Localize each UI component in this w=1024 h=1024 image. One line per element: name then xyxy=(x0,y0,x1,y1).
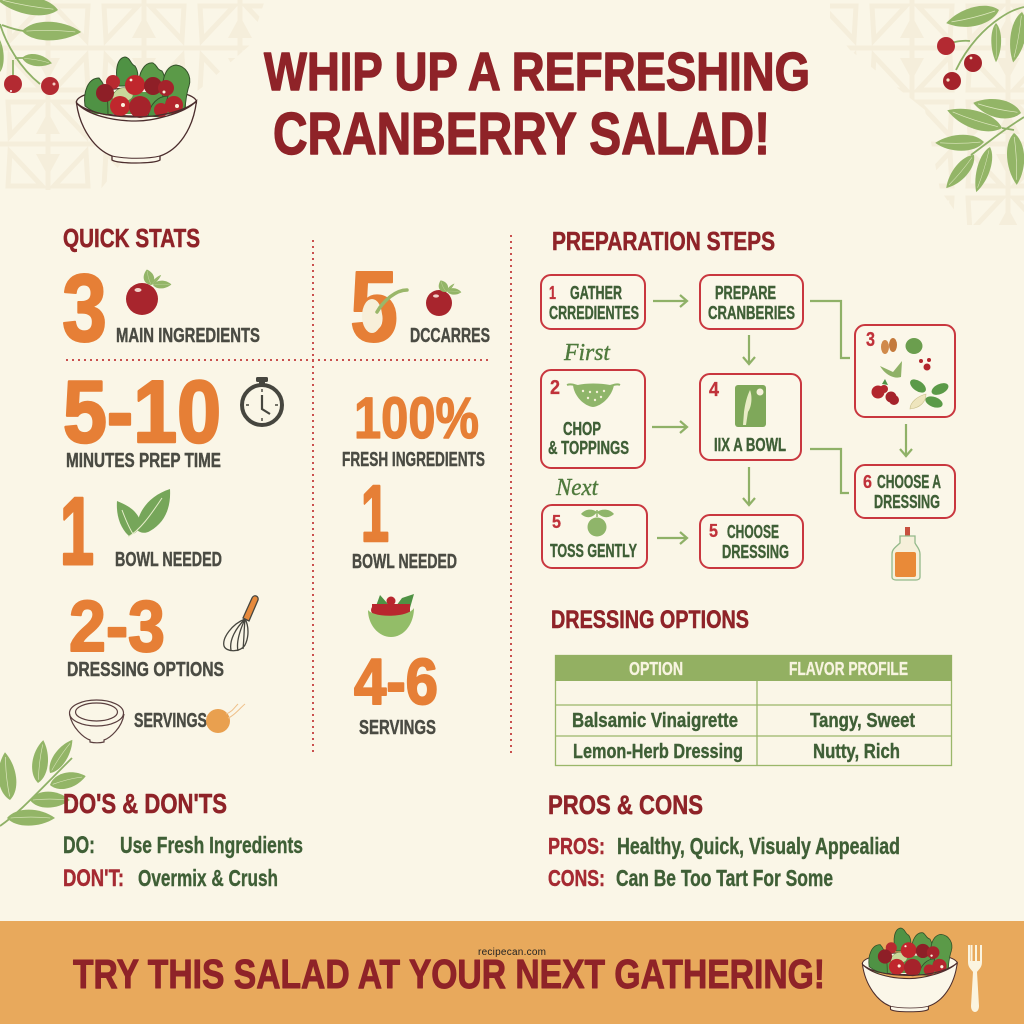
step box: choose a dressing 6: DRESSING xyxy=(874,492,940,512)
stat: 1 bowl needed right: BOWL NEEDED xyxy=(352,551,457,573)
icon: stopwatch xyxy=(242,377,282,425)
table: dressing options xyxy=(555,655,952,766)
annotation: first: First xyxy=(563,340,611,366)
step box: gather ingredients: CRREDIENTES xyxy=(549,303,639,323)
call to action: TRY THIS SALAD AT YOUR NEXT GATHERING! xyxy=(73,951,825,997)
arrow: prepare to ingredients connector xyxy=(810,301,850,358)
panel: do's and don'ts xyxy=(63,788,303,892)
icon: green leaf xyxy=(117,489,170,537)
table: dressing options: FLAVOR PROFILE xyxy=(789,659,908,679)
step box: mix a bowl: IIX A BOWL xyxy=(714,435,786,455)
title: CRANBERRY SALAD! xyxy=(273,101,770,167)
panel: dressing options xyxy=(551,606,952,766)
step box: toss gently: TOSS GENTLY xyxy=(550,541,637,561)
icon: small green salad bowl xyxy=(368,594,414,637)
stat: 2-3 dressing options xyxy=(67,587,224,681)
arrow: prepare to mix xyxy=(743,335,755,364)
stat: 5 dccarres: 5 xyxy=(350,251,398,363)
step box: choose a dressing 6: CHOOSE A xyxy=(877,472,941,492)
step box: chop and toppings xyxy=(541,370,645,468)
stat: 5 dccarres: DCCARRES xyxy=(410,325,490,347)
step box: chop and toppings: & TOPPINGS xyxy=(548,438,629,458)
stat: 5-10 minutes prep time: 5-10 xyxy=(63,362,221,461)
panel: quick stats xyxy=(60,223,490,743)
arrow: mix to choose dressing xyxy=(743,467,755,505)
decoration: top-left branch with berries xyxy=(0,0,81,95)
step box: chop and toppings: CHOP xyxy=(563,419,601,439)
table: dressing options: Nutty, Rich xyxy=(813,741,900,763)
stat: servings with outline bowl: SERVINGS xyxy=(134,710,207,732)
arrow: toss to choose dressing xyxy=(657,532,687,544)
step box: mix a bowl: 4 xyxy=(709,379,720,401)
step box: choose dressing 5: DRESSING xyxy=(722,542,789,562)
stat: 1 bowl needed right xyxy=(352,469,457,573)
row: don't: Overmix & Crush xyxy=(138,865,278,891)
table: dressing options: Lemon-Herb Dressing xyxy=(573,741,743,763)
row: pros: PROS: xyxy=(548,833,605,859)
step box: choose dressing 5: CHOOSE xyxy=(727,522,779,542)
stat: 2-3 dressing options: 2-3 xyxy=(69,587,165,667)
step box: gather ingredients xyxy=(541,275,645,329)
stat: 5 dccarres xyxy=(350,251,490,363)
step box: choose a dressing 6 xyxy=(855,465,955,518)
stat: 100% fresh ingredients: 100% xyxy=(354,386,479,451)
heading: pros and cons: PROS & CONS xyxy=(548,790,703,820)
stat: 100% fresh ingredients: FRESH INGREDIENTS xyxy=(342,449,485,471)
stat: 2-3 dressing options: DRESSING OPTIONS xyxy=(67,659,224,681)
row: pros: Healthy, Quick, Visualy Appealiad xyxy=(617,833,900,859)
step box: choose dressing 5: 5 xyxy=(709,521,718,541)
icon: dressing bottle xyxy=(892,527,920,580)
stat: 100% fresh ingredients xyxy=(342,386,485,471)
step box: choose dressing 5 xyxy=(700,515,803,568)
arrow: ingredients to dressing xyxy=(900,424,912,456)
row: cons: CONS: xyxy=(548,865,605,891)
row: cons xyxy=(548,865,833,891)
source credit: recipecan.com xyxy=(478,947,546,958)
icon: fork xyxy=(968,945,982,1012)
arrow: mix to dressing connector xyxy=(810,449,849,493)
step box: ingredients illustration: 3 xyxy=(866,329,875,351)
footer banner xyxy=(0,921,1024,1024)
background pattern: top right xyxy=(828,0,1024,226)
step box: choose a dressing 6: 6 xyxy=(863,472,872,492)
annotation: next: Next xyxy=(555,475,599,501)
heading: preparation steps: PREPARATION STEPS xyxy=(552,226,775,256)
stat: 1 bowl needed xyxy=(60,478,222,585)
table: dressing options: Tangy, Sweet xyxy=(810,710,915,732)
row: do: DO: xyxy=(63,832,95,859)
heading: quick stats: QUICK STATS xyxy=(63,223,200,253)
step box: prepare cranberries: PREPARE xyxy=(715,283,776,303)
row: don't xyxy=(63,865,278,892)
heading: dressing options: DRESSING OPTIONS xyxy=(551,606,749,634)
stat: 1 bowl needed: BOWL NEEDED xyxy=(115,549,222,571)
stat: 3 main ingredients: 3 xyxy=(62,255,107,362)
stat: 3 main ingredients xyxy=(62,255,260,362)
row: cons: Can Be Too Tart For Some xyxy=(616,865,833,891)
icon: salad bowl xyxy=(76,57,196,163)
decoration: top-right branches with berries xyxy=(935,1,1024,194)
decoration: bottom-left leaf branch xyxy=(0,736,88,826)
table: dressing options: Balsamic Vinaigrette xyxy=(572,710,738,732)
stat: 1 bowl needed: 1 xyxy=(60,478,94,585)
step box: chop and toppings: 2 xyxy=(550,377,560,399)
step box: gather ingredients: GATHER xyxy=(570,283,622,303)
table: dressing options: OPTION xyxy=(629,659,683,679)
row: don't: DON'T: xyxy=(63,865,124,892)
background pattern: top left xyxy=(0,0,270,192)
step box: prepare cranberries: CRANBERIES xyxy=(708,303,795,323)
step box: gather ingredients: 1 xyxy=(549,283,556,303)
arrow: gather to prepare xyxy=(653,295,687,307)
title xyxy=(264,42,810,167)
arrow: chop to mix xyxy=(652,421,687,433)
step box: prepare cranberries xyxy=(700,275,803,329)
step box: ingredients illustration xyxy=(855,325,955,417)
icon: whisk xyxy=(224,596,258,651)
row: do xyxy=(63,832,303,859)
panel: preparation steps xyxy=(541,226,955,580)
stat: 4-6 servings: SERVINGS xyxy=(359,717,436,739)
heading: do's and don'ts: DO'S & DON'TS xyxy=(63,788,227,819)
step box: toss gently xyxy=(542,505,647,568)
step box: toss gently: 5 xyxy=(552,512,561,532)
stat: servings with outline bowl xyxy=(70,700,245,743)
stat: 1 bowl needed right: 1 xyxy=(361,469,389,558)
row: do: Use Fresh Ingredients xyxy=(120,832,303,858)
row: pros xyxy=(548,833,900,859)
title: WHIP UP A REFRESHING xyxy=(264,42,810,102)
step box: mix a bowl xyxy=(700,374,801,460)
icon: footer salad bowl xyxy=(862,928,957,1012)
stat: 3 main ingredients: MAIN INGREDIENTS xyxy=(116,325,260,347)
stat: 5-10 minutes prep time: MINUTES PREP TIME xyxy=(66,450,221,472)
stat: 4-6 servings: 4-6 xyxy=(354,645,438,718)
panel: pros and cons xyxy=(548,790,900,891)
